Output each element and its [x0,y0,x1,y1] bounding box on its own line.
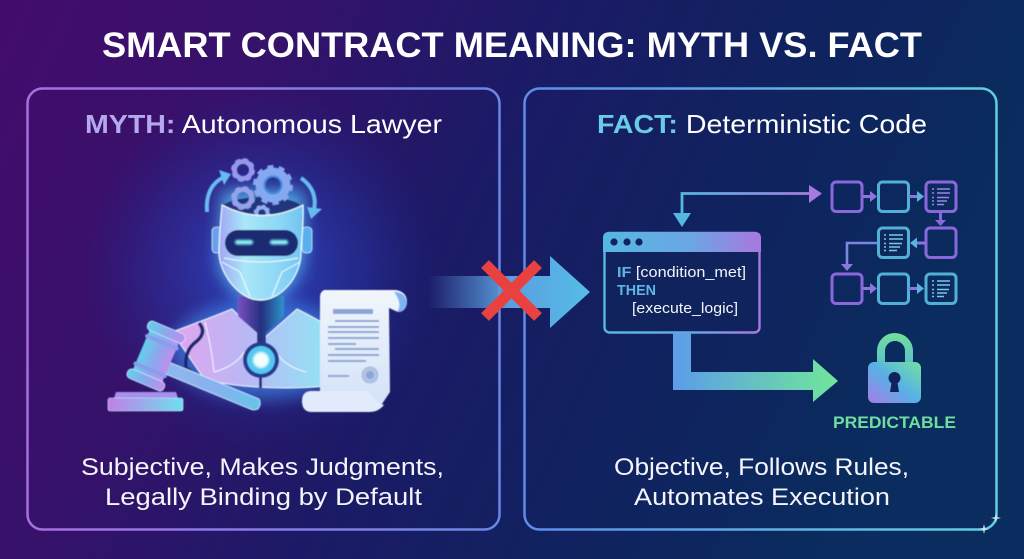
icon: padlock [868,337,921,403]
head opening [222,197,302,219]
code text: [execute_logic] [632,300,738,317]
sparkle [979,513,1001,534]
arrow: myth to fact [428,256,590,328]
icon: rotation arrows [207,170,322,219]
title: SMART CONTRACT MEANING: MYTH VS. FACT [102,26,922,65]
arrow: to predictable [673,333,838,402]
code text [617,264,746,317]
robot glow [82,95,442,445]
panel: myth [28,88,500,530]
icon: red cross [485,264,538,317]
robot visor [225,230,298,256]
predictable label: PREDICTABLE [833,413,956,432]
myth heading: MYTH: Autonomous Lawyer [85,109,442,139]
arrow with red cross [428,256,590,328]
code text: THEN [617,282,656,299]
myth description: Legally Binding by Default [105,484,422,511]
fact description: Objective, Follows Rules, [614,454,909,481]
code text: IF [condition_met] [617,264,746,281]
robot head [212,205,312,300]
myth description: Subjective, Makes Judgments, [81,454,444,481]
code window [603,232,761,332]
myth description [81,454,444,511]
fact description: Automates Execution [634,484,890,511]
fact heading: FACT: Deterministic Code [597,109,927,139]
icon: contract scroll [302,290,407,412]
arrow: loop to flow [673,185,822,227]
flow diagram [832,182,956,304]
panel: fact [524,88,1001,534]
flow row 2 [841,212,956,271]
robot core light [243,342,279,378]
illustration: robot lawyer [108,160,407,412]
robot eyes [235,240,288,244]
icon: gavel [108,320,260,411]
flow row 1 [832,182,956,212]
fact description [614,454,909,511]
icon: gears [232,160,291,220]
head glow [218,190,304,304]
robot torso [170,296,354,400]
flow row 3 [832,274,956,304]
